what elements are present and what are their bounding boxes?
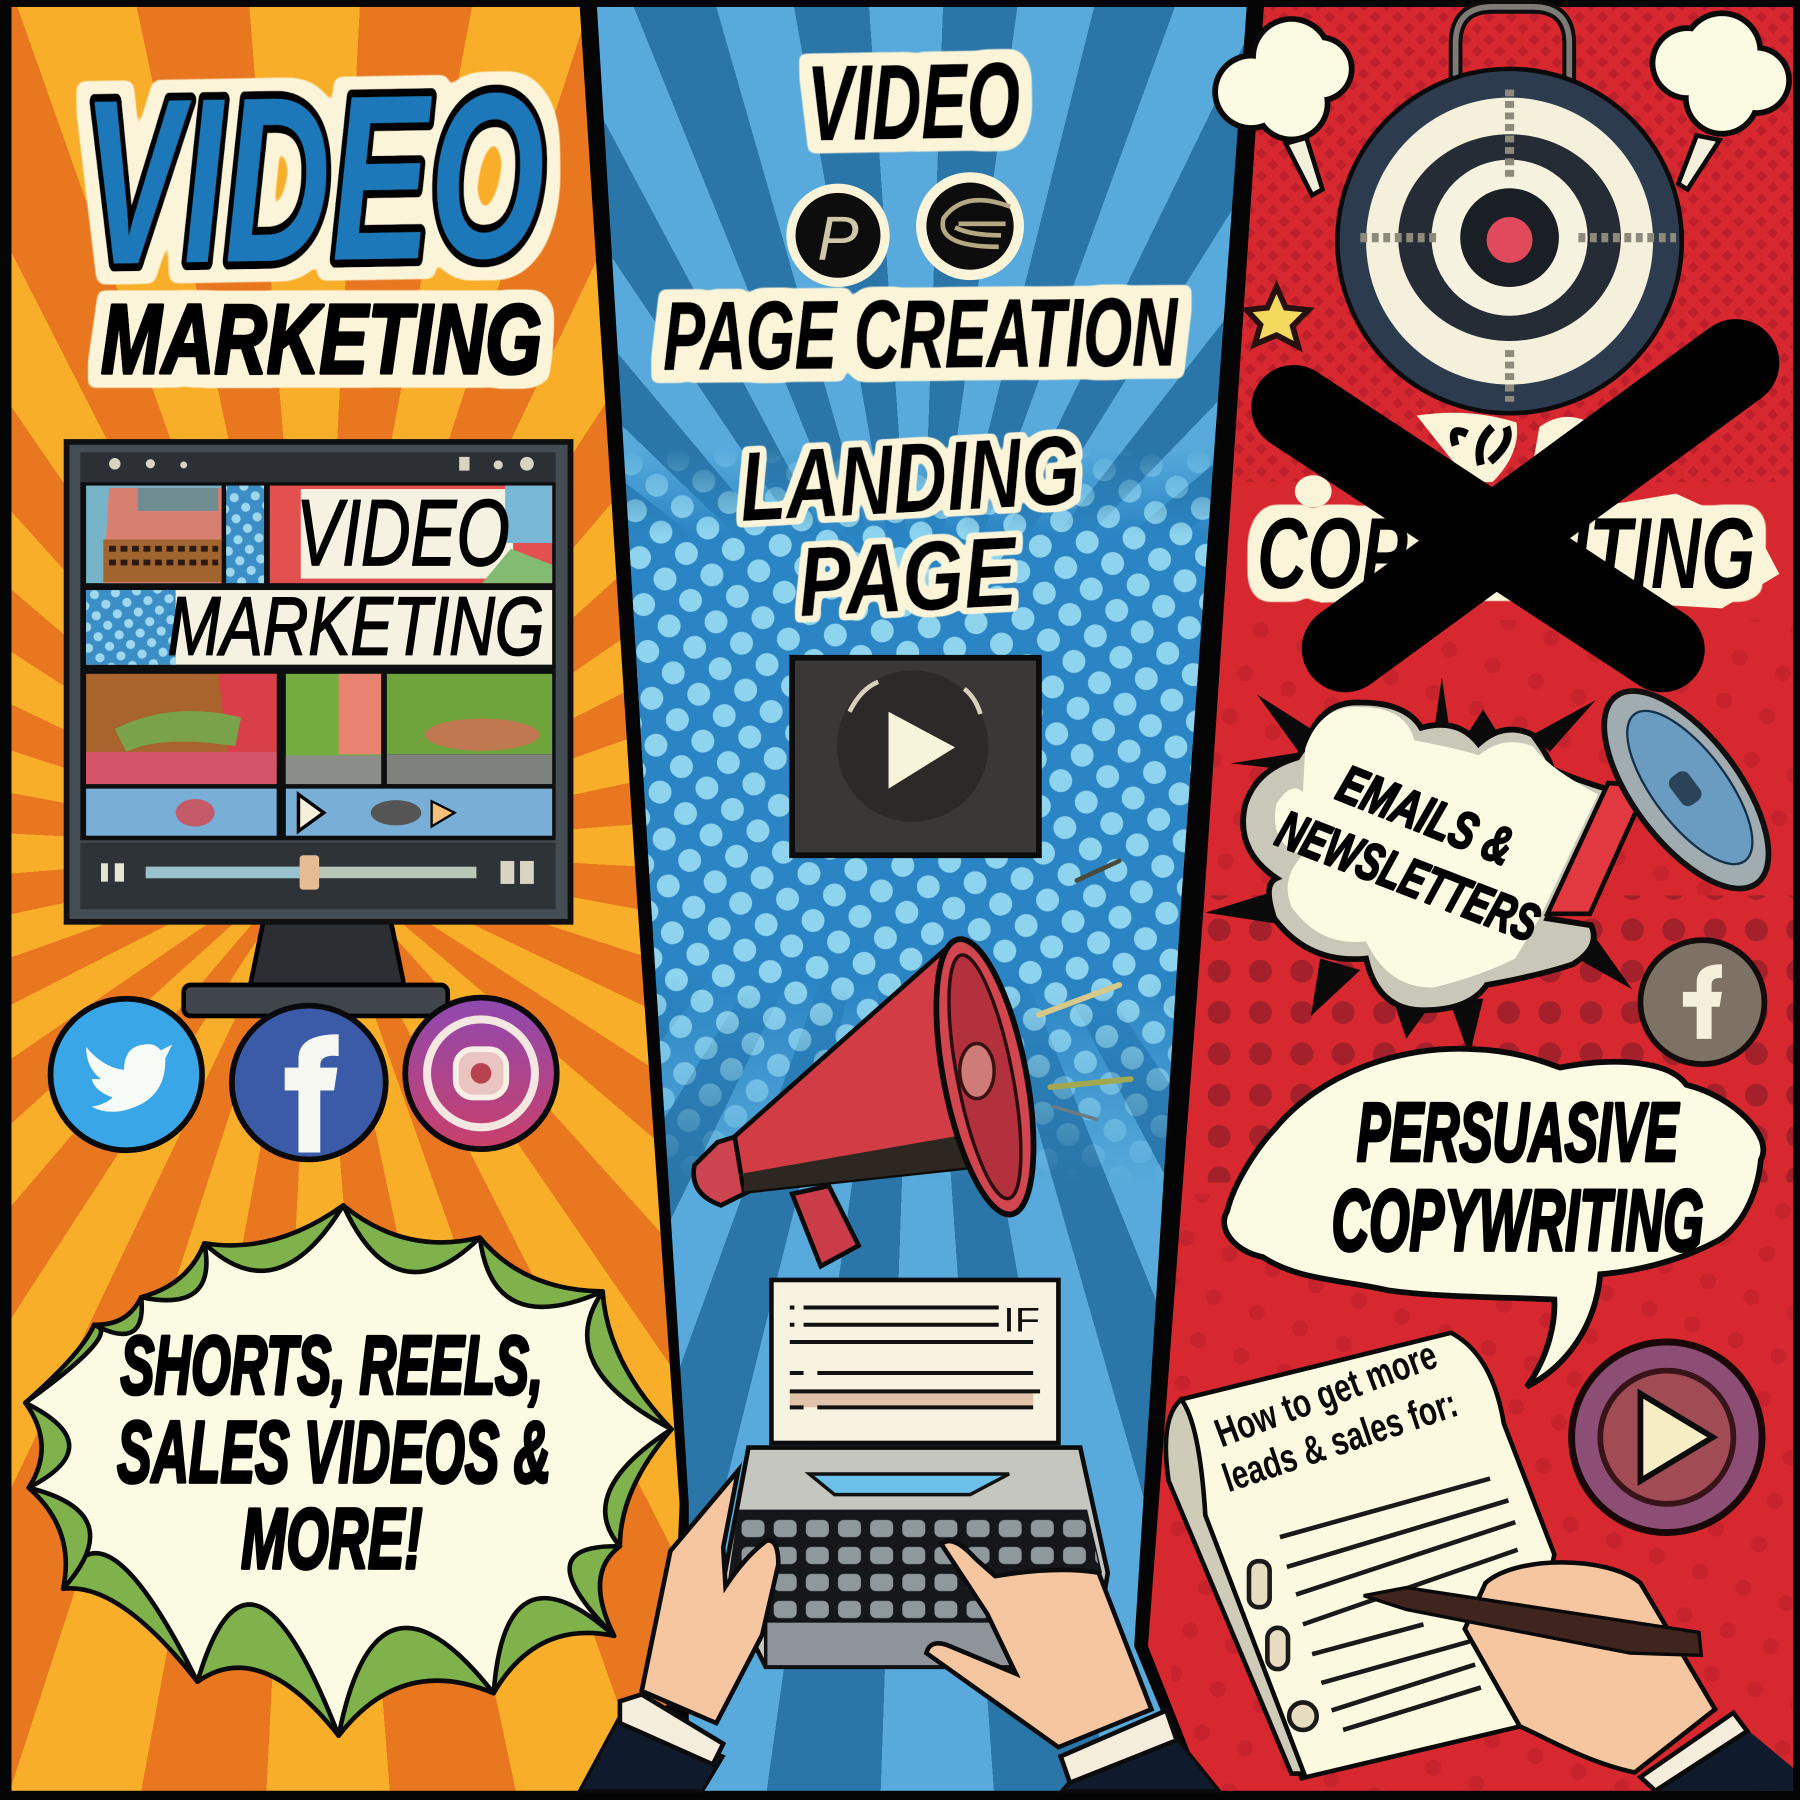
emails cloud xyxy=(1243,702,1609,1010)
title: Video: VIDEO xyxy=(81,43,547,314)
emails burst spikes xyxy=(1205,677,1632,1056)
hidden heading remnants xyxy=(1295,413,1779,608)
heading: video: VIDEO xyxy=(807,41,1021,163)
icon: swirl badge xyxy=(916,172,1024,280)
red halftone textures xyxy=(1171,0,1800,1791)
burst text line 2: SALES VIDEOS & xyxy=(117,1404,551,1501)
burst centre xyxy=(25,1205,672,1736)
video thumbnail: red and green xyxy=(86,674,277,784)
social icon: twitter xyxy=(51,999,202,1150)
social icon: facebook xyxy=(232,1006,386,1159)
black cross redaction xyxy=(1294,363,1736,650)
icon: megaphone xyxy=(694,931,1052,1266)
right cuff xyxy=(1061,1710,1177,1783)
typewriter xyxy=(723,1280,1108,1667)
player bar xyxy=(80,843,556,909)
panel: blue sunburst background xyxy=(597,6,1247,1791)
panel: red background xyxy=(1148,6,1794,1791)
writing hand xyxy=(1465,1562,1793,1791)
left sleeve xyxy=(580,1716,723,1791)
blue halftone field xyxy=(624,456,1213,1164)
icon: blue megaphone disc xyxy=(1547,665,1799,915)
icon: facebook badge xyxy=(1640,940,1764,1064)
burst text line 3: MORE! xyxy=(241,1491,422,1586)
video thumbnail: green and pink xyxy=(286,674,381,784)
text: newsletters: NEWSLETTERS xyxy=(1269,800,1547,954)
burst green lobes xyxy=(25,1205,672,1736)
social icon: instagram xyxy=(405,998,557,1149)
panel: orange sunburst background xyxy=(12,6,680,1791)
megaphone handle xyxy=(792,1186,859,1266)
icon: p badge: P xyxy=(817,204,859,273)
video panel: marketing title: MARKETING xyxy=(168,579,544,672)
title: Marketing: MARKETING xyxy=(101,284,542,394)
star xyxy=(1247,287,1309,347)
target xyxy=(1337,69,1682,413)
typewriter paper: IF xyxy=(1003,1302,1040,1340)
video strip: right xyxy=(286,789,552,836)
cloud shadow xyxy=(1243,702,1609,1010)
explosion burst xyxy=(25,1205,672,1736)
target handle xyxy=(1456,7,1569,80)
text: emails and: EMAILS & xyxy=(1329,754,1522,877)
megaphone bell xyxy=(918,931,1052,1222)
typewriter chin xyxy=(766,1621,1016,1667)
cloud right xyxy=(1650,10,1792,189)
notepad lines xyxy=(1280,1479,1518,1730)
video player xyxy=(792,658,1039,855)
video strip: left xyxy=(86,789,277,836)
icon: p badge xyxy=(786,184,890,287)
notepad checkboxes xyxy=(1249,1561,1317,1730)
target tick marks xyxy=(1360,90,1676,402)
notepad heading line 2: leads & sales for: xyxy=(1217,1381,1463,1501)
burst text line 1: SHORTS, REELS, xyxy=(121,1319,543,1412)
heading: landing: LANDING xyxy=(737,415,1082,542)
video panel: collage xyxy=(86,486,222,583)
window controls xyxy=(109,457,534,471)
typewriter paper xyxy=(771,1280,1058,1443)
monitor xyxy=(67,442,571,1016)
writing cuff xyxy=(1640,1713,1747,1791)
monitor bezel xyxy=(67,442,571,922)
video panel: halftone strip xyxy=(226,486,264,583)
notepad heading line 1: How to get more xyxy=(1209,1332,1443,1456)
video panel: video title: VIDEO xyxy=(296,480,510,585)
right sleeve xyxy=(1062,1738,1219,1791)
monitor stand xyxy=(184,918,448,1016)
typewriter keyboard xyxy=(728,1510,1102,1621)
heading: page: PAGE xyxy=(795,516,1022,637)
notepad roll xyxy=(1166,1399,1304,1774)
speed marks xyxy=(1039,861,1131,1119)
cloud fill xyxy=(1275,707,1598,987)
notepad xyxy=(1166,1332,1554,1778)
left cuff xyxy=(620,1694,723,1764)
heading: page creation: PAGE CREATION xyxy=(663,279,1180,391)
cloud left xyxy=(1212,16,1355,195)
pen xyxy=(1364,1588,1701,1655)
typewriter body xyxy=(723,1448,1108,1667)
video thumbnail: green scene xyxy=(387,674,552,784)
icon: play button xyxy=(1572,1342,1762,1533)
right typing hand xyxy=(926,1541,1219,1791)
megaphone mouthpiece xyxy=(694,1134,748,1205)
writing sleeve xyxy=(1659,1728,1793,1791)
megaphone cone xyxy=(735,944,987,1192)
typewriter display xyxy=(809,1474,1009,1495)
left typing hand xyxy=(580,1471,778,1791)
notepad page xyxy=(1181,1333,1554,1778)
speech bubble xyxy=(1224,1049,1763,1387)
video panel: marketing title xyxy=(86,579,552,672)
